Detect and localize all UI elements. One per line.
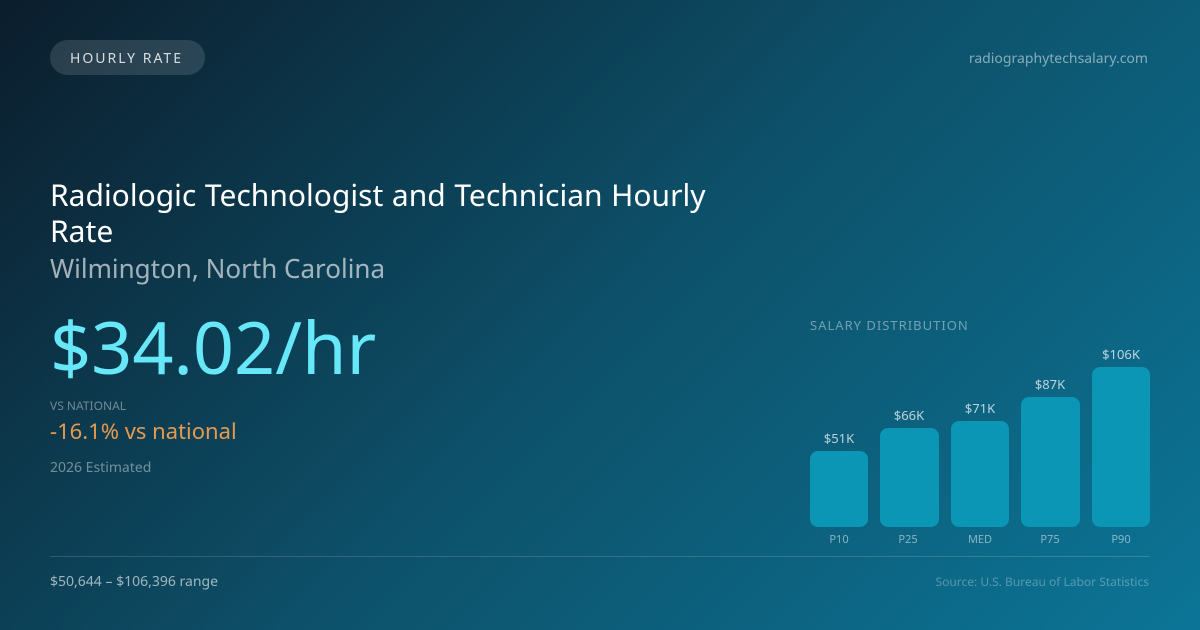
chart heading: SALARY DISTRIBUTION <box>810 316 969 334</box>
label: P10: P10 <box>829 532 849 547</box>
value: P90: $106K <box>1102 345 1140 363</box>
title <box>50 174 706 251</box>
comparison value: -16.1% vs national <box>50 416 237 446</box>
value: P25: $66K <box>894 406 924 424</box>
bar: P90 <box>1092 367 1150 527</box>
bar: P75 <box>1021 397 1080 527</box>
salary range: $50,644 – $106,396 range <box>50 572 218 591</box>
value: P75: $87K <box>1035 375 1065 393</box>
subtitle: location: Wilmington, North Carolina <box>50 250 385 286</box>
source: Source: U.S. Bureau of Labor Statistics <box>936 573 1149 590</box>
label: P75: P75 <box>1040 532 1060 547</box>
bar: P10 <box>810 451 868 527</box>
badge: hourly rate: HOURLY RATE <box>70 49 183 68</box>
headline value: $34.02/hr <box>50 298 376 396</box>
title: Radiologic Technologist and Technician Hourly <box>50 174 706 215</box>
site url: radiographytechsalary.com <box>969 49 1148 68</box>
bar: MED <box>951 421 1009 527</box>
value: P10: $51K <box>824 429 854 447</box>
title: Rate <box>50 210 113 251</box>
footer divider <box>50 556 1150 557</box>
comparison label: VS NATIONAL <box>50 397 126 414</box>
label: MED: MED <box>968 532 992 547</box>
bar: P25 <box>880 428 939 527</box>
label: P90: P90 <box>1111 532 1131 547</box>
estimate note: 2026 Estimated <box>50 458 151 477</box>
bar chart: salary distribution <box>810 316 1150 547</box>
badge: hourly rate <box>50 40 205 75</box>
label: P25: P25 <box>898 532 918 547</box>
value: MED: $71K <box>965 399 995 417</box>
